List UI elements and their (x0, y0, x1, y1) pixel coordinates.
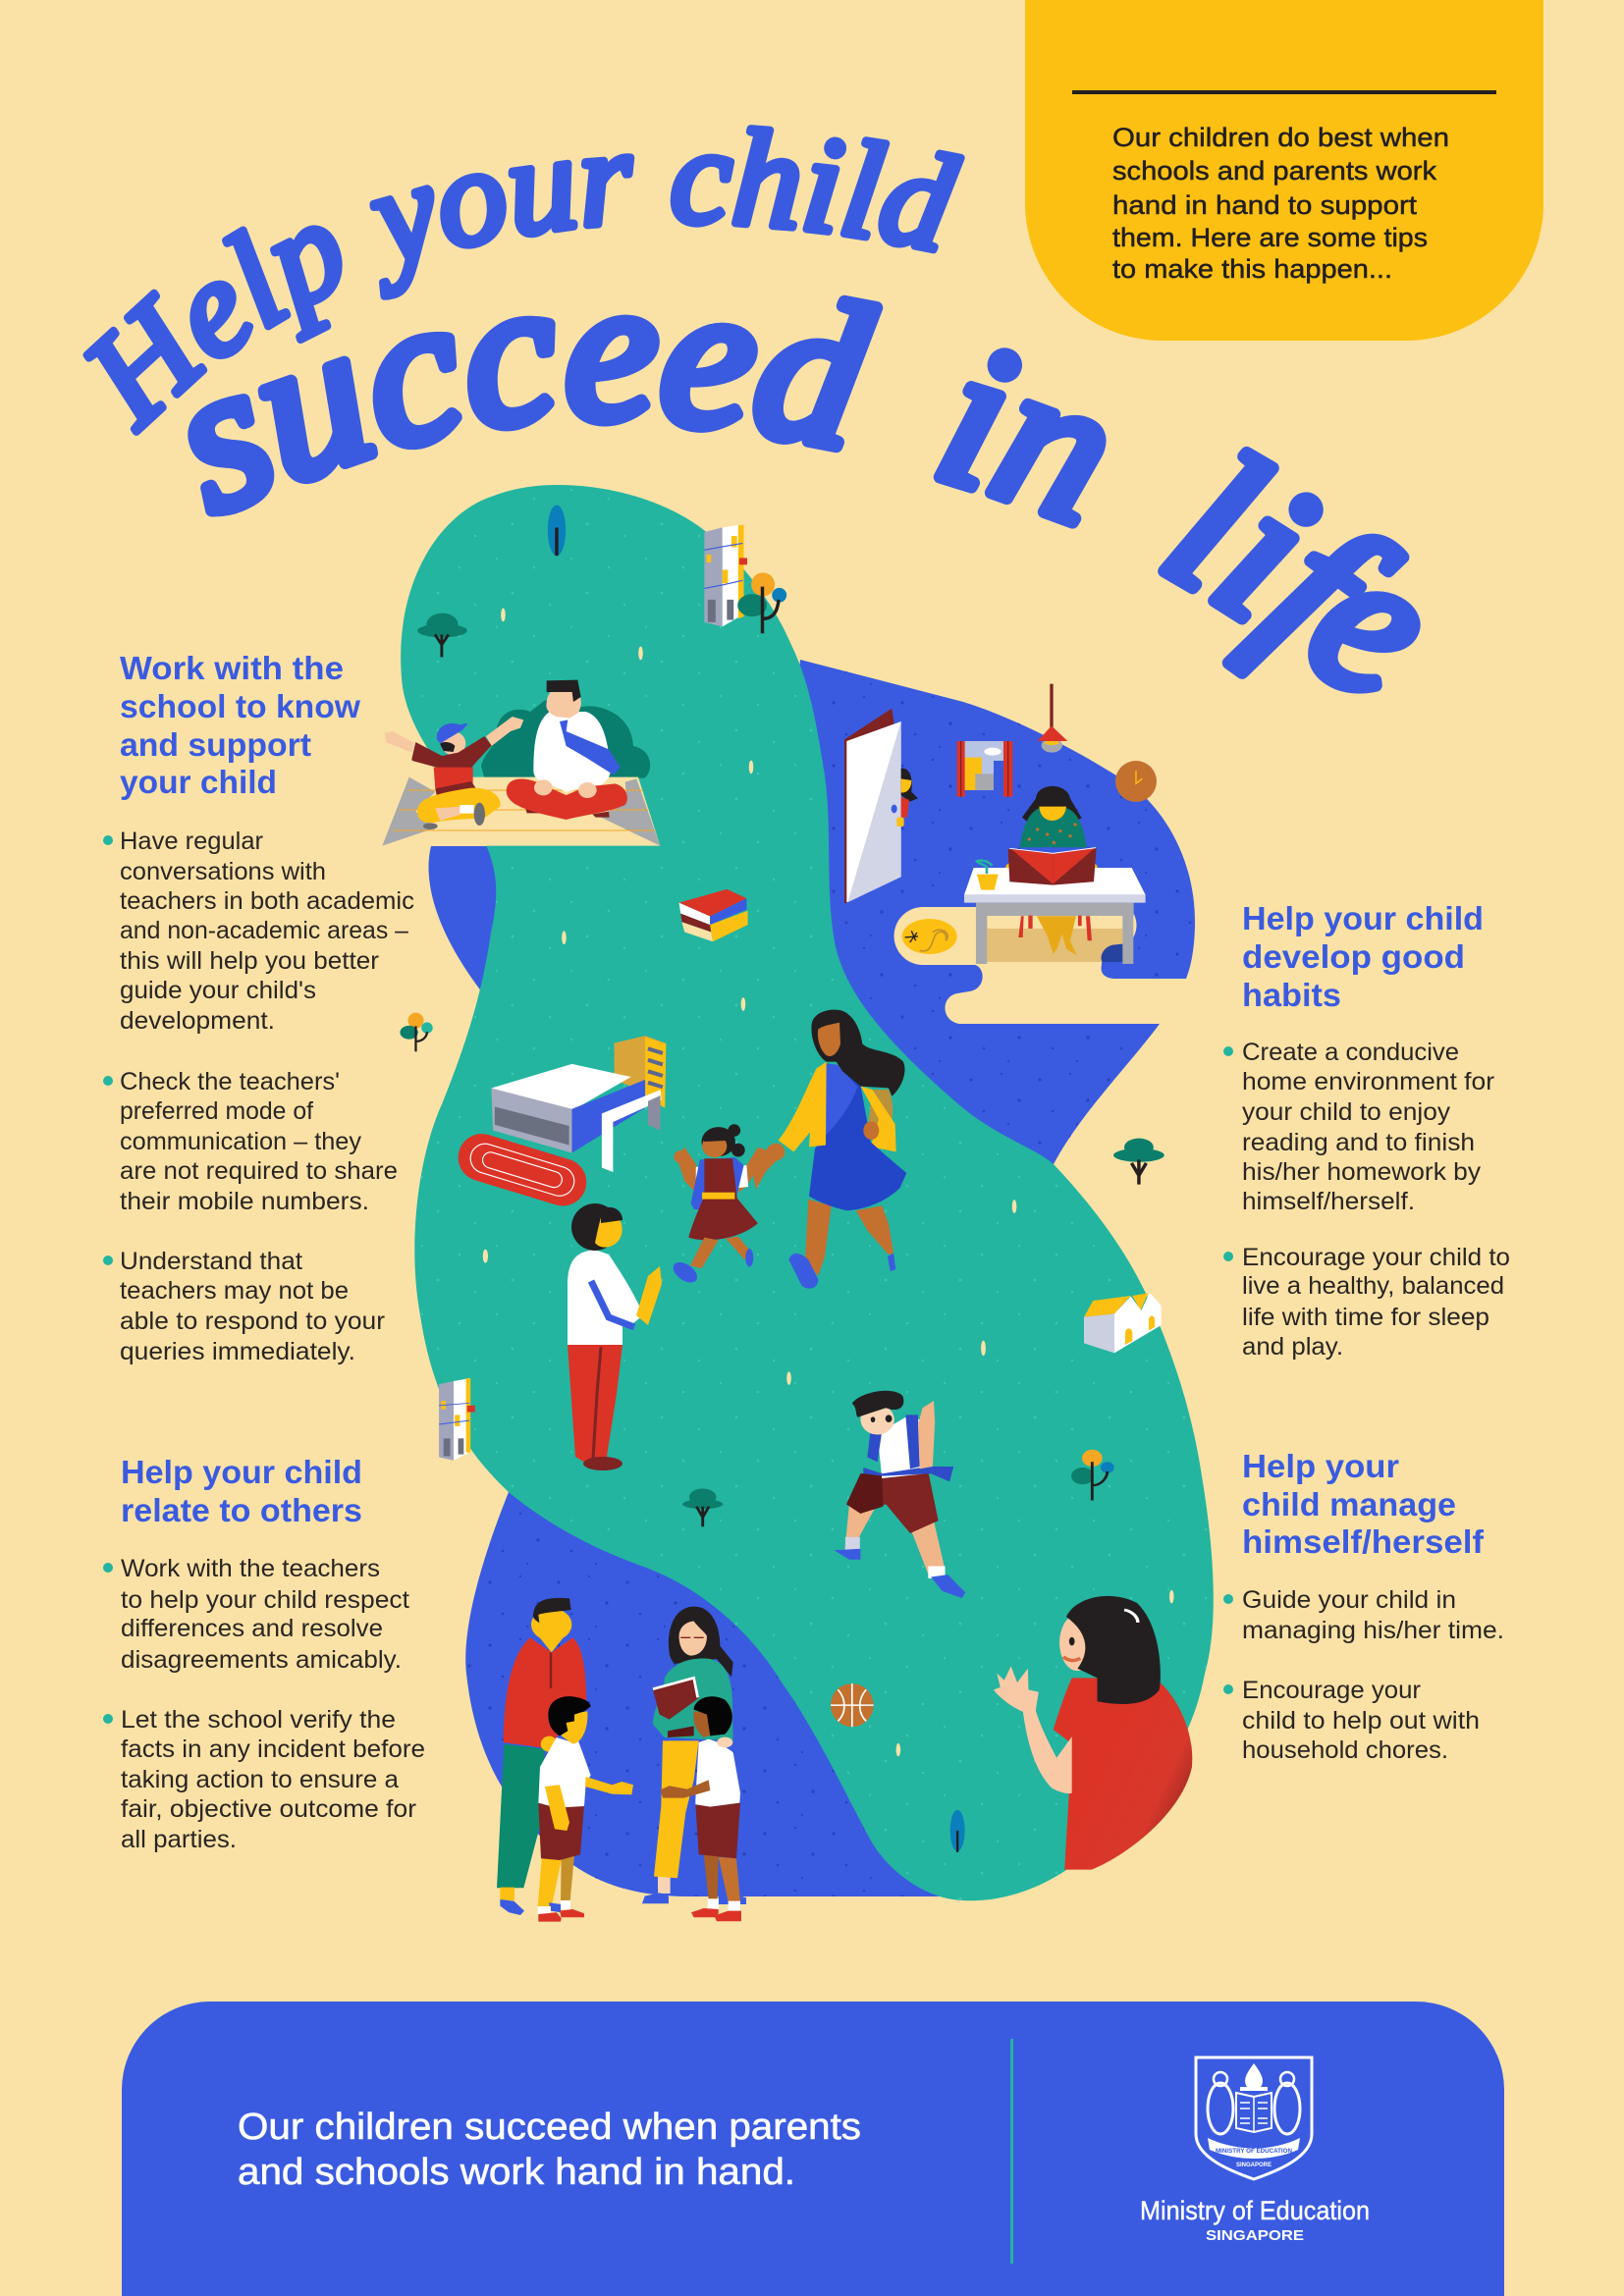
heading: relate to others (121, 1492, 362, 1528)
clock (1115, 761, 1157, 802)
title (82, 125, 1421, 694)
icon: orange tree (737, 572, 786, 633)
bullet 2 (103, 1068, 405, 1215)
bullet 2 (1223, 1244, 1517, 1361)
intro text: Our children do best when (1112, 123, 1449, 152)
figure: mother (753, 1010, 906, 1289)
icon: tall building (704, 525, 747, 626)
bullet 1 (1223, 1039, 1501, 1215)
bullet 2 (1223, 1677, 1487, 1764)
icon: ministry crest (1196, 2057, 1312, 2179)
bullet 1: Guide your child in (1242, 1586, 1456, 1614)
bullet 1: teachers in both academic (120, 887, 414, 915)
bullet 1: differences and resolve (121, 1615, 383, 1642)
bullet 2: all parties. (121, 1826, 237, 1853)
girl reading (1005, 786, 1098, 876)
panel: develop good habits (1223, 900, 1517, 1361)
panel: work with the school (103, 650, 421, 1365)
bullet 2 (103, 1706, 432, 1853)
footer panel (122, 2002, 1504, 2296)
bullet 1: guide your child's (120, 977, 316, 1004)
intro text: to make this happen... (1112, 254, 1392, 284)
bullet 2: Check the teachers' (120, 1068, 340, 1095)
teal winding path (401, 485, 1214, 1900)
ministry country: SINGAPORE (1206, 2227, 1304, 2244)
teacher figure (568, 1203, 662, 1470)
boy (385, 717, 523, 829)
figure: boy left (538, 1696, 633, 1922)
blue region: left strip (429, 846, 520, 992)
desk (964, 868, 1146, 964)
bullet 3: Understand that (120, 1248, 302, 1275)
heading: himself/herself (1242, 1523, 1485, 1560)
child peeking (896, 769, 918, 827)
icon: ministry crest: MINISTRY OF EDUCATION (1216, 2149, 1292, 2155)
sparkles (483, 608, 1016, 1262)
heading: Help your child (1242, 900, 1484, 936)
bush (481, 700, 650, 778)
bullet 1: himself/herself. (1242, 1188, 1415, 1215)
mat (382, 777, 660, 846)
icon: blue tree (548, 505, 566, 556)
icon: ministry crest: SINGAPORE (1236, 2163, 1272, 2168)
title line 2: succeed in life (188, 294, 1421, 694)
panel: relate to others (103, 1454, 432, 1853)
bullet 1 (103, 828, 421, 1035)
icon: small building (439, 1378, 475, 1461)
bullet 1: your child to enjoy (1242, 1098, 1451, 1126)
bullet 1: and non-academic areas – (120, 917, 408, 944)
bullet 1: Work with the teachers (121, 1555, 380, 1582)
heading: school to know (120, 688, 360, 724)
blue region: top right room (766, 660, 1195, 1164)
lower illustrations (439, 1250, 1192, 1870)
bullet 2: Let the school verify the (121, 1706, 396, 1734)
bullet 1: reading and to finish (1242, 1129, 1475, 1156)
heading: develop good (1242, 938, 1465, 975)
sparkles (483, 1250, 1174, 1756)
figure: running boy (834, 1391, 965, 1598)
bullet 1: Have regular (120, 828, 263, 855)
bullet 3: queries immediately. (120, 1338, 355, 1365)
bullet 3: able to respond to your (120, 1308, 385, 1335)
icon: right tree (1113, 1139, 1164, 1185)
figure: father (497, 1598, 586, 1915)
bullet 1 (1223, 1586, 1504, 1644)
heading: Help your (1242, 1448, 1399, 1484)
bullet 1: Create a conducive (1242, 1039, 1459, 1066)
bullet 2: and play. (1242, 1333, 1343, 1361)
bullet 2: are not required to share (120, 1157, 398, 1185)
man (507, 680, 627, 820)
icon: small orange tree (400, 1013, 433, 1051)
door (844, 709, 901, 903)
bullet 3: teachers may not be (120, 1277, 349, 1305)
title line 1: Help your child (82, 125, 965, 436)
bullet 2: Encourage your (1242, 1677, 1421, 1704)
heading: Help your child (121, 1454, 362, 1490)
figure: boy right (661, 1696, 741, 1921)
figure: waving woman (994, 1596, 1192, 1870)
figure: girl (670, 1124, 766, 1287)
sleeping cat (902, 919, 957, 954)
icon: basketball (831, 1683, 874, 1727)
plant pot (977, 861, 999, 890)
heading: child manage (1242, 1486, 1456, 1522)
bullet 2: Encourage your child to (1242, 1244, 1510, 1271)
bullet 1: development. (120, 1007, 275, 1035)
icon: blue tree bottom (950, 1810, 965, 1852)
panel: manage himself or herself (1223, 1448, 1504, 1764)
intro text: them. Here are some tips (1112, 223, 1428, 252)
bullet 1: disagreements amicably. (121, 1646, 402, 1674)
bullet 1: home environment for (1242, 1068, 1494, 1095)
window (957, 741, 1012, 797)
icon: stack of books (679, 889, 748, 941)
bullet 1: this will help you better (120, 947, 379, 975)
bullet 2: live a healthy, balanced (1242, 1272, 1504, 1300)
bullet 2: life with time for sleep (1242, 1304, 1489, 1331)
icon: right orange tree (1071, 1450, 1114, 1500)
icon: school building and track (453, 1036, 666, 1211)
bullet 2: household chores. (1242, 1736, 1448, 1764)
heading: Work with the (120, 650, 344, 686)
under-desk notch shade (1101, 944, 1122, 962)
heading: habits (1242, 977, 1341, 1013)
bullet 2: fair, objective outcome for (121, 1795, 416, 1823)
bullet 2: their mobile numbers. (120, 1188, 369, 1215)
ceiling lamp (1038, 684, 1067, 753)
bullet 2: taking action to ensure a (121, 1766, 399, 1793)
sparkle near house (981, 1341, 986, 1354)
footer message: and schools work hand in hand. (238, 2152, 795, 2193)
footer message: Our children succeed when parents (238, 2107, 861, 2148)
intro text: hand in hand to support (1112, 190, 1418, 220)
icon: house (1084, 1293, 1162, 1353)
bullet 1: conversations with (120, 858, 326, 885)
bullet 3 (103, 1248, 392, 1365)
bullet 1: his/her homework by (1242, 1158, 1482, 1186)
icon: dark tree (417, 614, 467, 657)
upper illustrations (400, 505, 1164, 1354)
scene: parent and child on mat (382, 680, 660, 846)
ministry name: Ministry of Education (1140, 2196, 1370, 2225)
bullet 1: managing his/her time. (1242, 1617, 1504, 1644)
room illustration (844, 684, 1157, 964)
heading: your child (120, 764, 277, 800)
blue region: bottom left (465, 1492, 943, 1896)
open book (1008, 848, 1097, 885)
intro panel (1025, 0, 1543, 341)
bullet 2: preferred mode of (120, 1097, 313, 1125)
bullet 1: to help your child respect (121, 1586, 409, 1614)
figure: woman teacher (642, 1607, 746, 1904)
intro text: schools and parents work (1112, 156, 1437, 186)
bullet 1 (103, 1555, 416, 1674)
icon: small green tree (682, 1489, 723, 1526)
bullet 2: child to help out with (1242, 1707, 1480, 1735)
family group (497, 1598, 746, 1922)
bullet 2: communication – they (120, 1128, 361, 1155)
heading: and support (120, 726, 311, 763)
bullet 2: facts in any incident before (121, 1735, 425, 1763)
